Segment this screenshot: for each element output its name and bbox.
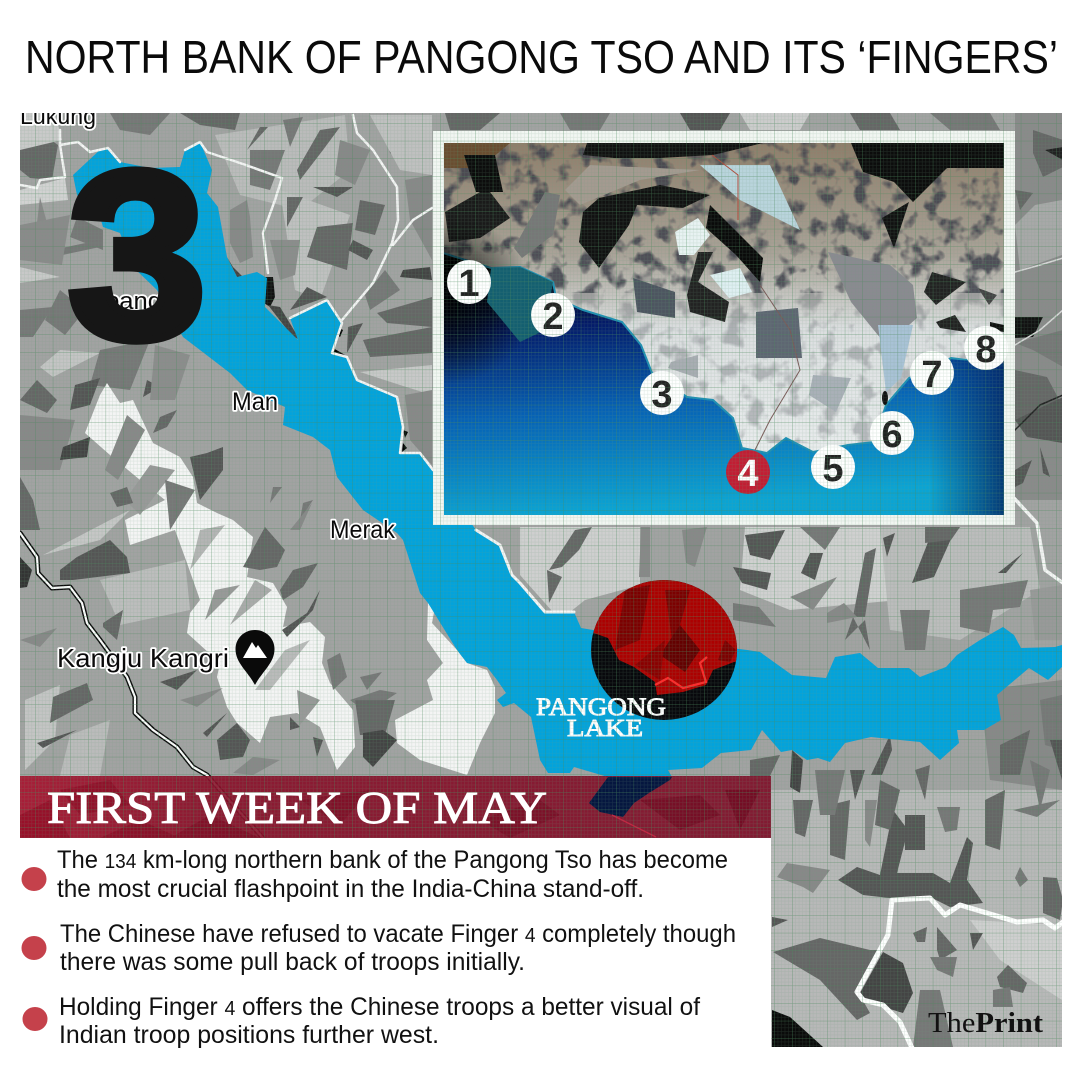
red locator circle — [591, 580, 737, 720]
logo: ThePrint: ThePrint — [928, 1007, 1043, 1039]
small island — [882, 391, 888, 405]
under inset — [520, 527, 640, 610]
place labels: Kangju Kangri — [57, 643, 229, 673]
inset: satellite photo with fingers — [433, 131, 1015, 525]
lake label — [536, 698, 666, 736]
finger 3 — [640, 371, 684, 416]
top strip — [445, 113, 500, 130]
panel: text block — [0, 838, 771, 1080]
icon: mountain pin — [236, 630, 274, 685]
satellite land — [444, 143, 1004, 515]
finger 7: 7 — [921, 354, 943, 396]
upper mountains — [215, 115, 350, 210]
lake: Pangong Tso — [73, 142, 1062, 777]
finger 6: 6 — [881, 414, 903, 456]
place labels: Lukung — [20, 103, 96, 129]
bottom right — [771, 790, 1062, 1047]
finger 8: 8 — [975, 329, 997, 371]
bullet 2: The Chinese have refused to vacate Finger 4 completely though — [60, 920, 736, 948]
place labels: Merak — [330, 516, 395, 544]
finger 7 — [910, 351, 954, 396]
white background — [0, 838, 771, 1080]
bullet 1 — [22, 846, 728, 903]
finger 4 highlighted: 4 — [737, 453, 759, 495]
inset shallow patch — [487, 267, 553, 342]
place labels: Spang — [88, 288, 162, 315]
bullet 3: Holding Finger 4 offers the Chinese troops a better visual of — [59, 993, 700, 1021]
finger 4 highlighted — [726, 450, 770, 495]
shards under banner — [20, 800, 70, 838]
finger 6 — [870, 411, 914, 456]
bullet 1: the most crucial flashpoint in the India-China stand-off. — [57, 875, 644, 903]
bullet 2 — [22, 920, 736, 976]
big step number: 3 — [67, 121, 207, 390]
bullet 2: there was some pull back of troops initially. — [60, 948, 525, 976]
finger 2: 2 — [542, 296, 564, 338]
inset frame — [433, 131, 1015, 525]
inset lake water — [443, 253, 1005, 516]
finger 3: 3 — [651, 374, 673, 416]
bullet 3 — [22, 993, 700, 1049]
bullet 1: The 134 km-long northern bank of the Pangong Tso has become — [57, 846, 728, 874]
finger 5 — [811, 445, 855, 490]
terrain base — [20, 113, 1062, 838]
lake portion through banner — [589, 777, 672, 817]
finger 1: 1 — [458, 263, 480, 305]
white peaks — [85, 383, 355, 770]
top-left — [20, 138, 58, 180]
finger 2 — [531, 293, 575, 338]
bullet 3: Indian troop positions further west. — [59, 1021, 439, 1049]
lake label: LAKE — [567, 716, 643, 742]
left-mid shards — [43, 510, 130, 555]
lake label: PANGONG — [536, 694, 666, 721]
finger 1 — [447, 260, 491, 305]
banner: first week of May — [20, 776, 771, 838]
finger 5: 5 — [822, 448, 844, 490]
place labels — [20, 103, 395, 673]
place labels: Man — [232, 388, 278, 416]
finger 8 — [964, 326, 1008, 371]
banner heading: FIRST WEEK OF MAY — [47, 782, 547, 833]
right strip — [1015, 113, 1062, 500]
